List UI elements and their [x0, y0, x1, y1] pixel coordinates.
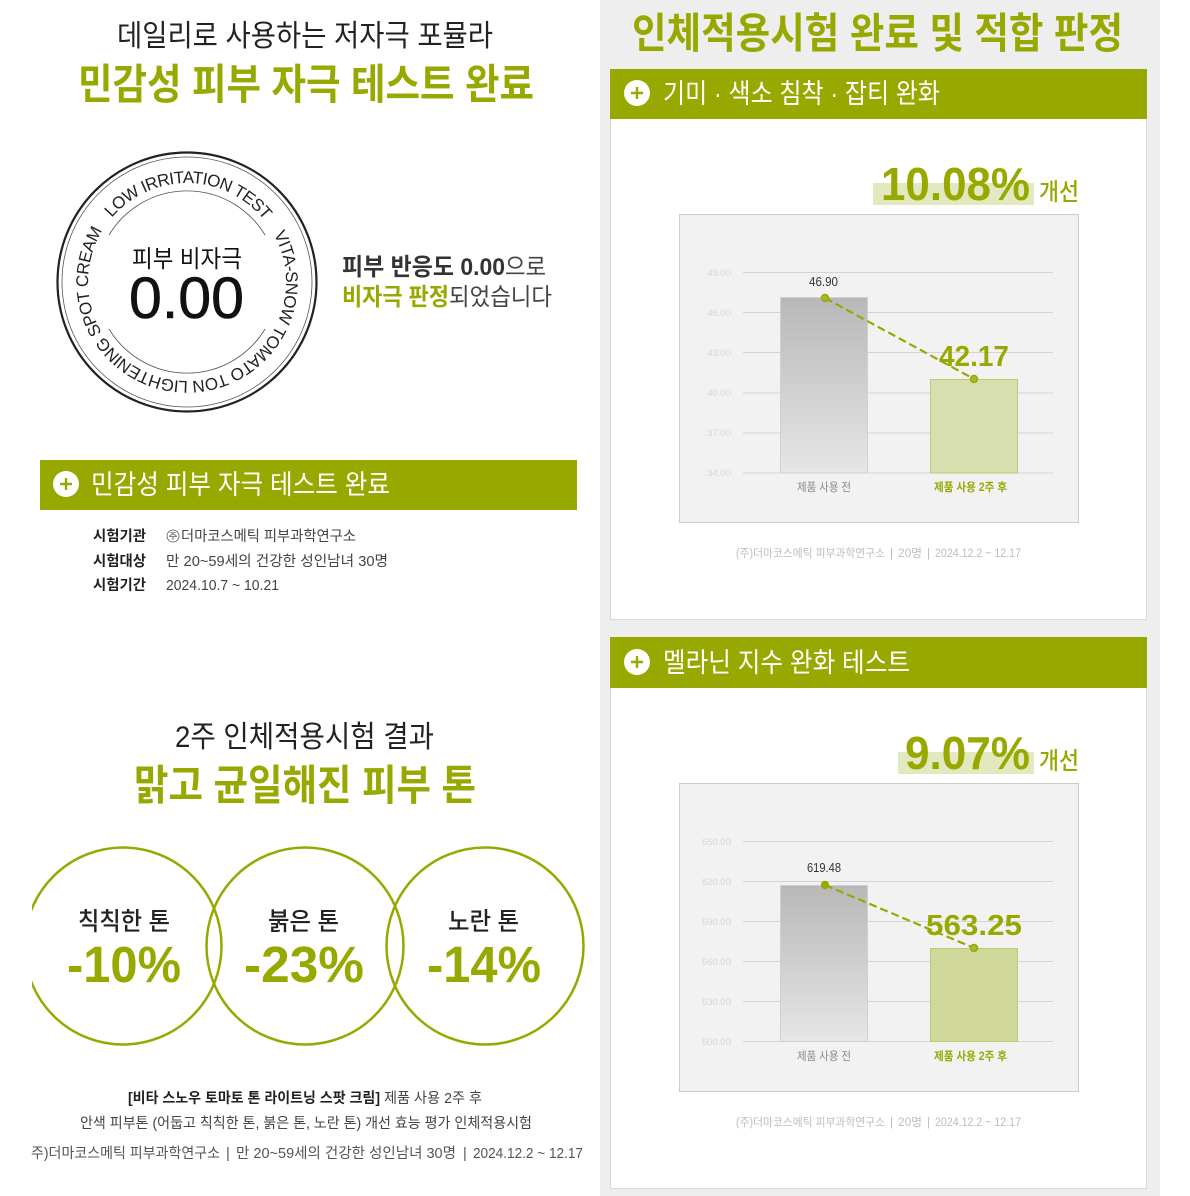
stamp: low irritation test 0.00: LOW IRRITATION TEST	[104, 171, 273, 217]
callout: 9.07% improvement: 9.07%	[905, 727, 1030, 779]
text block: footnote: |	[226, 1146, 230, 1162]
text block: footnote: 주)더마코스메틱 피부과학연구소	[31, 1145, 220, 1162]
text block: melanin source	[736, 1116, 1021, 1129]
panel header: spots and freckles	[610, 69, 1147, 119]
text block: test details: 더마코스메틱 피부과학연구소	[181, 528, 356, 545]
text block: melanin source: |	[927, 1117, 930, 1129]
panel header: sensitive skin test complete: 민감성 피부 자극 테스트 완료	[91, 470, 390, 500]
text block: footnote: [비타 스노우 토마토 톤 라이트닝 스팟 크림]	[128, 1090, 380, 1107]
bar chart: melanin: 650.00	[702, 837, 731, 848]
bar chart: spots: 49.00	[707, 268, 731, 279]
text block: skin reaction verdict: 되었습니다	[449, 284, 552, 311]
heading: low irritation intro: 데일리로 사용하는 저자극 포뮬라	[117, 20, 493, 53]
panel header: sensitive skin test complete	[40, 460, 577, 510]
chart: three tone improvement circles	[24, 848, 584, 1044]
bar chart: spots: 43.00	[707, 348, 731, 359]
text block: spots source: |	[890, 548, 893, 560]
stamp: low irritation test 0.00: 0.00	[129, 266, 244, 331]
bar chart: spots	[680, 214, 1078, 522]
panel: right background	[600, 0, 1160, 1196]
chart: three tone improvement circles: -23%	[244, 936, 364, 993]
text block: test details: 2024.10.7 ~ 10.21	[166, 578, 279, 594]
bar chart: melanin: 590.00	[702, 917, 731, 928]
bar chart: melanin: 500.00	[702, 1037, 731, 1048]
text block: skin reaction verdict: 비자극 판정	[342, 284, 449, 311]
text block: footnote: 제품 사용 2주 후	[384, 1090, 482, 1107]
bar chart: spots: 제품 사용 2주 후	[934, 480, 1007, 494]
bar chart: melanin: 563.25	[926, 910, 1022, 942]
text block: melanin source: (주)더마코스메틱 피부과학연구소	[736, 1116, 885, 1129]
text block: melanin source: 20명	[898, 1116, 922, 1129]
panel: melanin index	[610, 637, 1147, 1188]
callout: 10.08% improvement: 개선	[1039, 179, 1079, 206]
text block: test details: 주	[168, 531, 178, 541]
chart: three tone improvement circles: -10%	[67, 936, 181, 993]
chart: three tone improvement circles: -14%	[427, 936, 541, 993]
bar chart: melanin: 530.00	[702, 997, 731, 1008]
panel header: melanin index: 멜라닌 지수 완화 테스트	[663, 648, 910, 678]
bar chart: spots: 37.00	[707, 428, 731, 439]
heading: two week test result	[134, 721, 476, 809]
bar chart: melanin: 제품 사용 2주 후	[934, 1049, 1007, 1063]
heading: low irritation intro	[78, 20, 534, 108]
text block: footnote: 만 20~59세의 건강한 성인남녀 30명	[236, 1145, 456, 1162]
text block: footnote: 2024.12.2 ~ 12.17	[473, 1146, 583, 1162]
bar chart: melanin: 560.00	[702, 957, 731, 968]
heading: low irritation intro: 민감성 피부 자극 테스트 완료	[78, 61, 534, 108]
text block: footnote: 안색 피부톤 (어둡고 칙칙한 톤, 붉은 톤, 노란 톤) 개선 효능 평가 인체적용시험	[80, 1115, 532, 1132]
text block: test details	[93, 528, 388, 594]
text block: melanin source: |	[890, 1117, 893, 1129]
panel: spots and freckles	[610, 69, 1147, 620]
text block: skin reaction verdict: 피부 반응도 0.00	[342, 254, 505, 281]
stamp: low irritation test 0.00: VITA-SNOW TOMATO TON LIGHTENING SPOT CREAM	[76, 226, 298, 393]
bar chart: spots: 40.00	[707, 388, 731, 399]
bar chart: spots: 34.00	[707, 468, 731, 479]
bar chart: melanin	[680, 784, 1078, 1092]
text block: melanin source: 2024.12.2 ~ 12.17	[935, 1117, 1021, 1129]
text block: test details: 시험대상	[93, 553, 146, 570]
heading: two week test result: 2주 인체적용시험 결과	[175, 721, 434, 754]
text block: test details: 만 20~59세의 건강한 성인남녀 30명	[166, 553, 388, 570]
bar chart: spots: 제품 사용 전	[797, 481, 851, 494]
bar chart: spots: 46.90	[809, 275, 838, 289]
text block: skin reaction verdict	[342, 254, 552, 311]
callout: 10.08% improvement: 10.08%	[881, 158, 1030, 210]
bar chart: melanin: 제품 사용 전	[797, 1050, 851, 1063]
text block: spots source	[736, 547, 1021, 560]
bar chart: spots: 46.00	[707, 308, 731, 319]
heading: test complete and suitability: 인체적용시험 완료 및 적합 판정	[632, 10, 1123, 57]
panel header: melanin index	[610, 637, 1147, 688]
bar chart: melanin: 620.00	[702, 877, 731, 888]
text block: spots source: 20명	[898, 547, 922, 560]
chart: three tone improvement circles: 노란 톤	[448, 908, 519, 936]
chart: three tone improvement circles: 붉은 톤	[268, 908, 339, 936]
text block: spots source: 2024.12.2 ~ 12.17	[935, 548, 1021, 560]
callout: 9.07% improvement: 개선	[1039, 748, 1079, 775]
heading: two week test result: 맑고 균일해진 피부 톤	[134, 762, 476, 809]
text block: skin reaction verdict: 으로	[505, 254, 546, 281]
text block: test details: 시험기관	[93, 528, 146, 545]
bar chart: spots: 42.17	[939, 341, 1009, 373]
panel header: spots and freckles: 기미 · 색소 침착 · 잡티 완화	[663, 79, 940, 109]
text block: test details: 시험기간	[93, 577, 146, 594]
bar chart: melanin: 619.48	[807, 861, 841, 875]
stamp: low irritation test 0.00: 피부 비자극	[132, 246, 242, 273]
text block: spots source: |	[927, 548, 930, 560]
chart: three tone improvement circles: 칙칙한 톤	[78, 908, 170, 936]
text block: footnote	[31, 1090, 583, 1162]
text block: spots source: (주)더마코스메틱 피부과학연구소	[736, 547, 885, 560]
text block: footnote: |	[463, 1146, 467, 1162]
stamp: low irritation test 0.00	[56, 151, 318, 413]
